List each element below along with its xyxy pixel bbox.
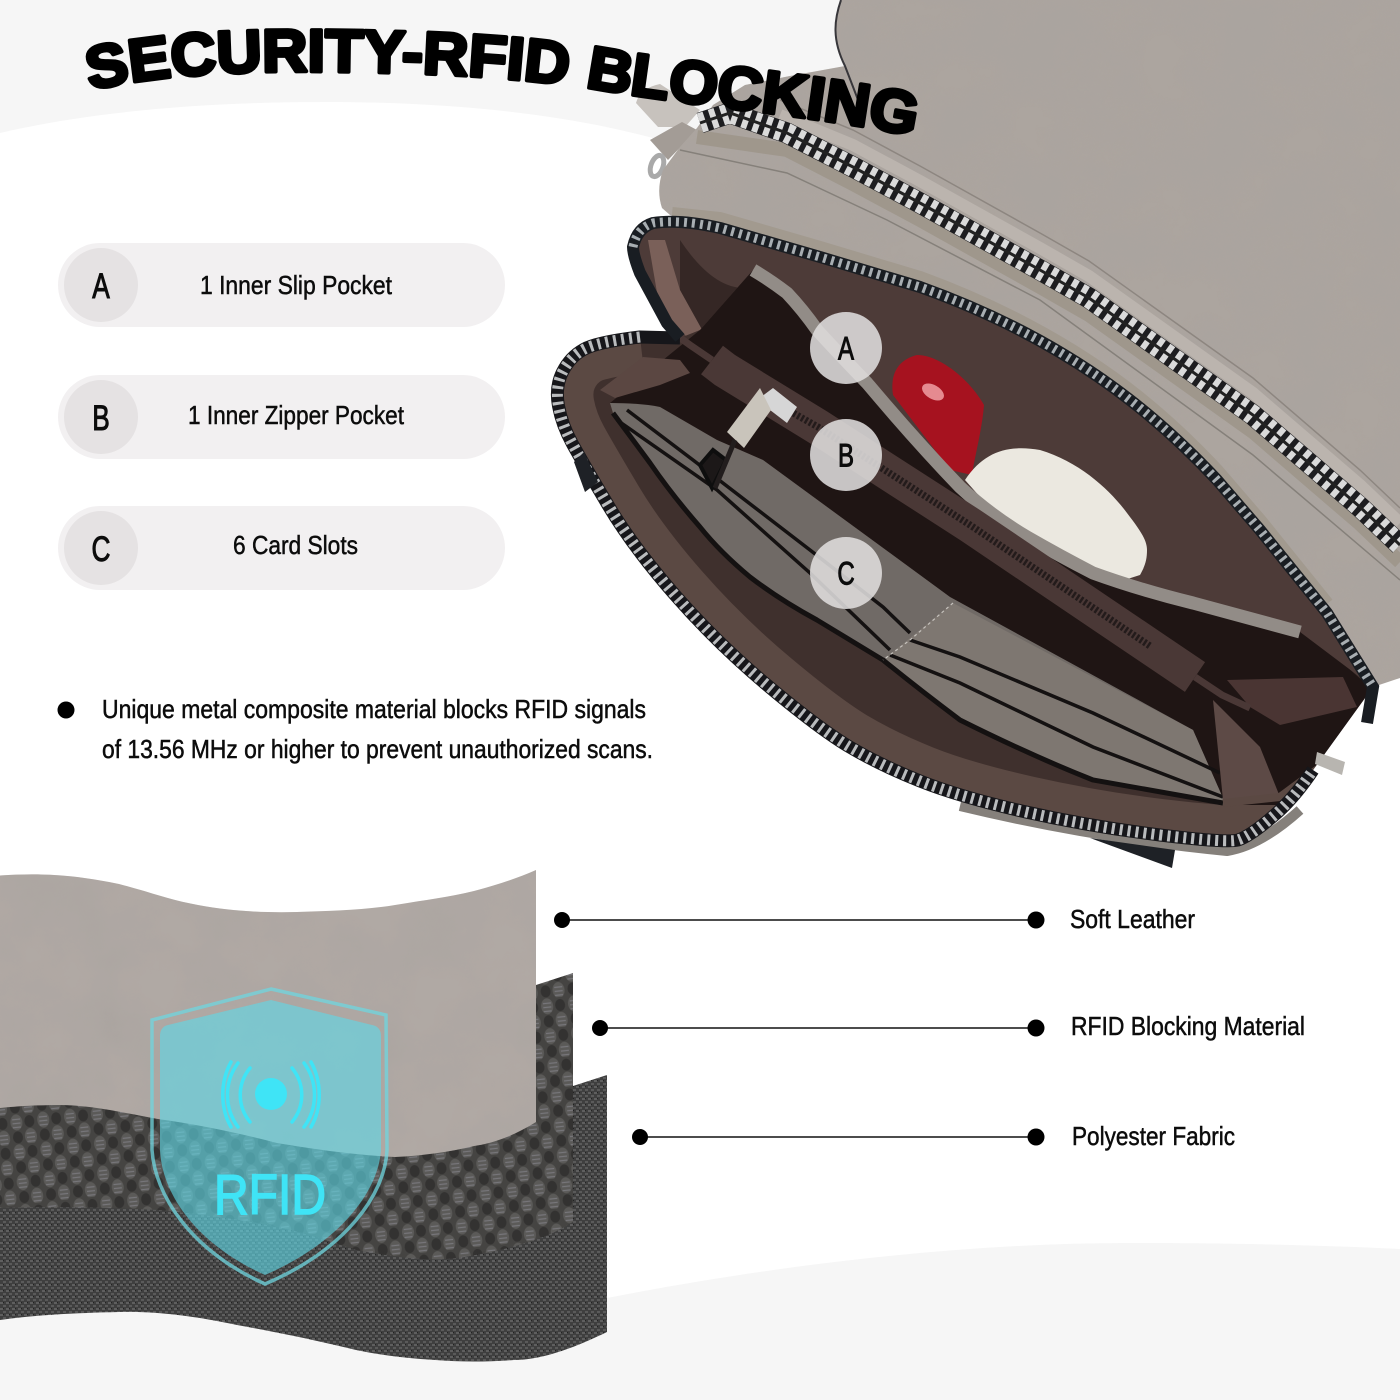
leader: rfid blocking material: [592, 1011, 1305, 1041]
feature row A: [58, 243, 505, 327]
product photo: open bag: [540, 0, 1400, 870]
leader: soft leather: [554, 904, 1195, 934]
slip pocket piping: [753, 270, 1300, 632]
marker C on bag: [810, 537, 882, 609]
tape above main zipper: [672, 214, 1327, 604]
right side ring: [1315, 752, 1345, 775]
inner zipper pocket band: [672, 332, 1250, 708]
lid fabric band: [557, 337, 1313, 841]
top zipper: [700, 113, 1400, 545]
dark interior behind pockets: [610, 270, 1373, 805]
feature row A: A: [92, 266, 110, 306]
leader: rfid blocking material: RFID Blocking Material: [1071, 1011, 1305, 1041]
leader: polyester fabric: Polyester Fabric: [1072, 1121, 1235, 1151]
lower lid lobe: [564, 270, 1367, 834]
lid left corner flap: [600, 357, 690, 398]
bag underside dark edges: [574, 452, 1175, 868]
lid right flaps: [1213, 700, 1280, 800]
background: bottom grey band: [0, 1243, 1400, 1400]
bullet description: [58, 694, 653, 764]
rfid label: RFID: [214, 1163, 326, 1227]
marker C on bag: C: [837, 555, 855, 591]
feature row B: 1 Inner Zipper Pocket: [188, 400, 405, 430]
upper pocket lining: [633, 222, 1373, 700]
polyester fabric layer: [0, 1075, 607, 1362]
marker A on bag: A: [838, 330, 854, 366]
feature row B: B: [92, 398, 110, 438]
background: top grey band: [0, 0, 1400, 140]
left lining strip: [648, 240, 705, 340]
dark shadow left of pocket: [680, 240, 800, 345]
feature row C: 6 Card Slots: [233, 530, 358, 560]
feature row C: C: [92, 529, 110, 569]
bullet description: of 13.56 MHz or higher to prevent unauthorized scans.: [102, 734, 653, 764]
rfid shield icon: [152, 989, 387, 1284]
main zipper edge: [633, 222, 1373, 723]
soft leather layer: [0, 870, 536, 1157]
lipstick: [892, 355, 984, 475]
zipper pull: [700, 388, 797, 488]
feature row C: [58, 506, 505, 590]
feature row B: [58, 375, 505, 459]
leader: soft leather: Soft Leather: [1070, 904, 1195, 934]
signal icon: [223, 1062, 319, 1127]
tape under top zipper: [697, 137, 1400, 562]
leader: polyester fabric: [632, 1121, 1235, 1151]
strap tab and ring: [636, 84, 700, 178]
lid zipper edge: [557, 337, 1313, 841]
card slots: [610, 403, 1226, 805]
bullet description: Unique metal composite material blocks RFID signals: [102, 694, 646, 724]
cream jar: [965, 448, 1147, 590]
marker B on bag: B: [838, 437, 854, 473]
marker A on bag: [810, 312, 882, 384]
feature row A: 1 Inner Slip Pocket: [200, 270, 393, 300]
rfid blocking knit layer: [0, 973, 573, 1259]
bag back panel, flap and body: [659, 0, 1400, 687]
lid underside grey edge: [960, 806, 1300, 851]
flap rolled edge: [780, 115, 1400, 523]
title: SECURITY-RFID BLOCKING: [86, 28, 918, 134]
marker B on bag: [810, 419, 882, 491]
material layers swatch: [0, 870, 607, 1362]
body seam: [680, 150, 1400, 580]
lid lower lining: [1222, 765, 1316, 805]
